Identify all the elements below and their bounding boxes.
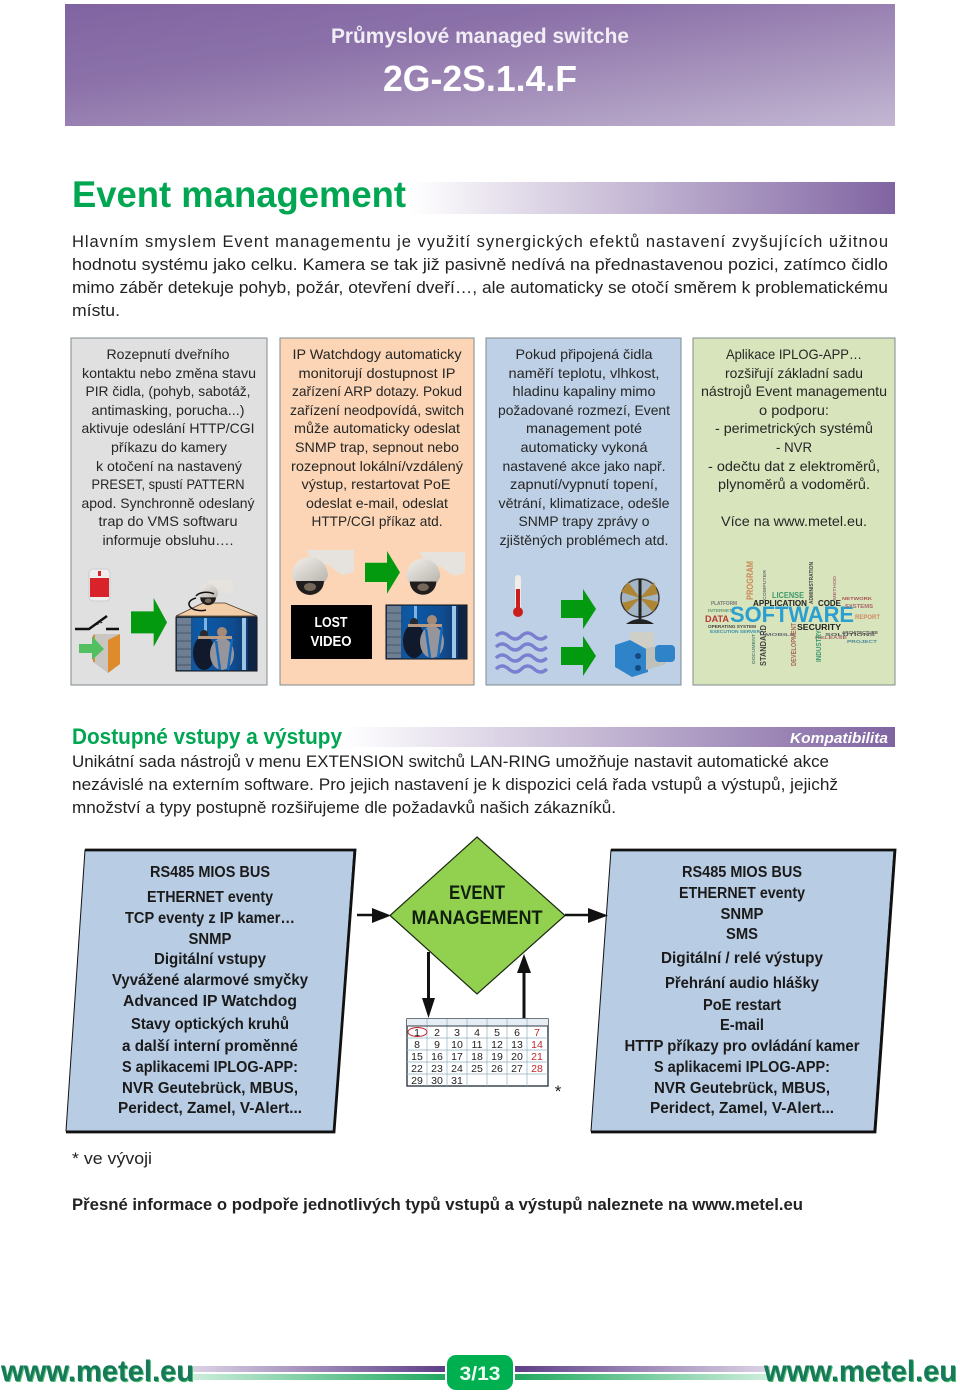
compatibility tag: Kompatibilita <box>790 730 888 747</box>
inputs list: Vyvážené alarmové smyčky <box>112 972 308 989</box>
paragraph: inputs and outputs: nezávislé na externím software. Pro jejich nastavení je k dispozici celá řada vstupů a výstupů, jejichž <box>72 776 838 794</box>
calendar days: 1 <box>414 1027 420 1039</box>
calendar days: 14 <box>531 1039 543 1051</box>
panel text: odeslat e-mail, odeslat <box>306 495 448 511</box>
inputs list: NVR Geutebrück, MBUS, <box>122 1080 298 1097</box>
icon: thermometer <box>513 575 523 617</box>
footer url left: www.metel.eu <box>0 1355 194 1388</box>
word cloud: SOFTWARE <box>730 602 854 627</box>
panel text: aktivuje odeslání HTTP/CGI <box>82 420 254 436</box>
panel text: PRESET, spustí PATTERN <box>92 476 244 492</box>
inputs list: S aplikacemi IPLOG-APP: <box>122 1059 298 1076</box>
calendar days: 20 <box>511 1051 523 1063</box>
arrow: up from calendar <box>517 954 531 1018</box>
event management diamond: MANAGEMENT <box>412 907 543 929</box>
word cloud: DATA <box>705 614 729 624</box>
word cloud: OPERATING SYSTEM <box>708 624 756 629</box>
outputs list: Peridect, Zamel, V-Alert... <box>650 1100 834 1117</box>
calendar days: 26 <box>491 1063 503 1075</box>
arrow <box>561 636 596 676</box>
word cloud: LICENSE <box>772 591 805 600</box>
lost video box <box>291 605 372 659</box>
outputs list: SMS <box>726 926 758 943</box>
inputs list: SNMP <box>188 931 232 948</box>
calendar days <box>411 1027 543 1087</box>
panel text: plynoměrů a vodoměrů. <box>718 476 870 492</box>
word cloud: COMPUTER <box>762 569 767 600</box>
intro paragraph: Hlavním smyslem Event managementu je využití synergických efektů nastavení zvyšujících užitnou <box>72 233 888 251</box>
asterisk: * <box>555 1082 562 1101</box>
word cloud: MOBILE <box>765 632 795 637</box>
arrow <box>561 589 596 629</box>
icon: fan <box>621 579 659 624</box>
panel text: - NVR <box>776 439 812 455</box>
icon: alarm sensor <box>89 569 110 601</box>
panel text: rozšiřují základní sadu <box>725 365 863 381</box>
intro paragraph <box>72 233 888 320</box>
inputs list: Peridect, Zamel, V-Alert... <box>118 1100 302 1117</box>
arrow <box>365 551 400 594</box>
inputs list: Stavy optických kruhů <box>131 1016 289 1033</box>
word cloud: RELEASE <box>815 635 847 640</box>
footer url left: www.metel.eu <box>1 1356 195 1389</box>
calendar days: 22 <box>411 1063 423 1075</box>
calendar days: 16 <box>431 1051 443 1063</box>
inputs list: ETHERNET eventy <box>147 889 273 906</box>
intro paragraph: hodnotu systému jako celku. Kamera se tak již pasivně nedívá na přednastavenou pozici, zatímco čidlo <box>72 256 888 274</box>
panel text: k otočení na nastavený <box>96 458 242 474</box>
panel text: kontaktu nebo změna stavu <box>82 365 256 381</box>
header title: 2G-2S.1.4.F <box>383 58 577 99</box>
panel text: Více na www.metel.eu. <box>721 513 867 529</box>
icon: water pump <box>615 632 675 677</box>
word cloud: REPORT <box>855 615 880 621</box>
panel text: větrání, klimatizace, odešle <box>498 495 670 511</box>
icon: opening door <box>79 634 120 673</box>
panel text: o podporu: <box>759 402 829 418</box>
calendar days: 25 <box>471 1063 483 1075</box>
arrow: down to calendar <box>422 952 435 1018</box>
panel text <box>290 346 464 529</box>
word cloud: DEVELOPMENT <box>791 622 798 666</box>
footer url right: www.metel.eu <box>763 1355 957 1388</box>
panel text: zapnutí/vypnutí topení, <box>510 476 658 492</box>
calendar days: 23 <box>431 1063 443 1075</box>
word cloud: ADMINISTRATION <box>809 562 815 604</box>
calendar days: 24 <box>451 1063 463 1075</box>
calendar days: 15 <box>411 1051 423 1063</box>
panel text: rozepnout lokální/vzdálený <box>291 458 463 474</box>
panel text: zařízení neodpovídá, switch <box>290 402 464 418</box>
word cloud: ARCHITECTURE <box>842 630 878 635</box>
word cloud: METHOD <box>832 575 837 600</box>
page number badge <box>447 1355 513 1390</box>
paragraph: inputs and outputs: množství a typy postupně rozšiřujeme dle požadavků našich zákazníků. <box>72 799 616 817</box>
calendar days: 11 <box>472 1039 483 1051</box>
header subtitle: Průmyslové managed switche <box>331 25 629 48</box>
icon: camera left <box>292 550 354 595</box>
event management diamond: EVENT <box>449 882 505 904</box>
panel text: HTTP/CGI příkaz atd. <box>312 513 442 529</box>
inputs list: Digitální vstupy <box>154 951 266 968</box>
panel text: apod. Synchronně odeslaný <box>82 495 254 511</box>
panel text: antimasking, porucha...) <box>92 402 244 418</box>
panel text: informuje obsluhu…. <box>102 532 234 548</box>
arrow: event management to outputs <box>565 908 608 923</box>
paragraph: inputs and outputs: Unikátní sada nástrojů v menu EXTENSION switchů LAN-RING umožňuje nastavit automatické akce <box>72 753 829 771</box>
arrow <box>131 598 167 647</box>
closing note: Přesné informace o podpoře jednotlivých typů vstupů a výstupů naleznete na www.metel.eu <box>72 1196 803 1214</box>
calendar <box>407 1019 548 1087</box>
footer url right: www.metel.eu <box>764 1356 958 1389</box>
photo: camera view <box>176 617 257 671</box>
panel text: Aplikace IPLOG-APP… <box>726 346 862 362</box>
word cloud: NETWORK <box>842 596 873 601</box>
panel text: hladinu kapaliny mimo <box>512 383 656 399</box>
panel text: požadované rozmezí, Event <box>498 402 670 418</box>
footnote: * ve vývoji <box>72 1150 152 1168</box>
word cloud: PLATFORM <box>711 601 737 607</box>
word cloud: INTERNET <box>708 608 732 613</box>
icon: door contact switch <box>75 616 119 629</box>
panel text: - perimetrických systémů <box>715 420 873 436</box>
calendar days: 8 <box>414 1039 420 1051</box>
panel text <box>82 346 256 548</box>
panel text: nastavené akce jako např. <box>502 458 666 474</box>
section bar: inputs and outputs <box>345 727 895 747</box>
inputs list: Advanced IP Watchdog <box>123 993 297 1010</box>
word cloud: SYSTEMS <box>845 604 874 610</box>
panel: sensors <box>486 338 681 685</box>
word cloud: SOLUTIONS <box>825 632 875 637</box>
panel text: zjištěných problémech atd. <box>500 532 668 548</box>
outputs list: HTTP příkazy pro ovládání kamer <box>624 1038 860 1055</box>
calendar days: 12 <box>491 1039 503 1051</box>
lost video box: LOST <box>314 615 348 631</box>
calendar days: 3 <box>454 1027 460 1039</box>
panel text: zařízení ARP dotazy. Pokud <box>292 383 462 399</box>
calendar days: 17 <box>451 1051 463 1063</box>
calendar days: 2 <box>434 1027 440 1039</box>
calendar days: 18 <box>471 1051 483 1063</box>
word cloud: PROJECT <box>847 639 877 644</box>
outputs list <box>624 864 860 1117</box>
inputs list: a další interní proměnné <box>122 1038 298 1055</box>
calendar days: 6 <box>514 1027 520 1039</box>
word cloud: INDUSTRY <box>816 630 823 662</box>
arrow: inputs to event management <box>357 908 391 923</box>
panel: inputs <box>66 850 355 1132</box>
inputs list: TCP eventy z IP kamer… <box>125 910 295 927</box>
outputs list: S aplikacemi IPLOG-APP: <box>654 1059 830 1076</box>
event management diamond <box>390 837 565 994</box>
panel text: nástrojů Event managementu <box>701 383 887 399</box>
calendar days: 5 <box>494 1027 500 1039</box>
panel text: automaticky vykoná <box>520 439 648 455</box>
intro paragraph: mimo záběr detekuje pohyb, požár, otevření dveří…, ale automaticky se otočí směrem k problematickému <box>72 279 888 297</box>
panel: IPLOG-APP software <box>693 338 895 685</box>
icon: rotating camera <box>176 580 257 616</box>
paragraph: inputs and outputs <box>72 753 838 817</box>
panel: outputs <box>591 850 895 1132</box>
word cloud <box>705 561 880 666</box>
calendar days: 31 <box>451 1075 463 1087</box>
inputs list: RS485 MIOS BUS <box>150 864 270 881</box>
panel text: příkazu do kamery <box>111 439 227 455</box>
header banner <box>65 4 895 126</box>
outputs list: Digitální / relé výstupy <box>661 950 823 967</box>
panel text: trap do VMS softwaru <box>98 513 238 529</box>
calendar days: 30 <box>431 1075 443 1087</box>
calendar days: 19 <box>491 1051 503 1063</box>
calendar days: 13 <box>511 1039 523 1051</box>
panel text: Pokud připojená čidla <box>516 346 653 362</box>
word cloud: DOCUMENT <box>751 634 756 664</box>
outputs list: RS485 MIOS BUS <box>682 864 802 881</box>
outputs list: SNMP <box>720 906 764 923</box>
panel text: PIR čidla, (pohyb, sabotáž, <box>86 383 250 399</box>
intro paragraph: místu. <box>72 302 120 320</box>
heading: event management: Event management <box>72 174 406 215</box>
word cloud: SECURITY <box>797 623 842 632</box>
panel: door and sensor events <box>71 338 267 685</box>
panel text: naměří teplotu, vlhkost, <box>508 365 660 381</box>
panel text: IP Watchdogy automaticky <box>292 346 462 362</box>
calendar days: 4 <box>474 1027 480 1039</box>
outputs list: Přehrání audio hlášky <box>665 975 819 992</box>
icon: camera right <box>406 552 465 595</box>
panel text <box>498 346 670 548</box>
panel text: může automaticky odeslat <box>294 420 460 436</box>
calendar days: 27 <box>511 1063 523 1075</box>
outputs list: NVR Geutebrück, MBUS, <box>654 1080 830 1097</box>
word cloud: PROGRAM <box>745 561 755 600</box>
outputs list: ETHERNET eventy <box>679 885 805 902</box>
icon: water waves <box>496 633 547 672</box>
outputs list: E-mail <box>720 1017 764 1034</box>
calendar days: 28 <box>531 1063 543 1075</box>
inputs list <box>112 864 308 1117</box>
panel text: monitorují dostupnost IP <box>298 365 456 381</box>
calendar days: 10 <box>451 1039 463 1051</box>
panel text: Rozepnutí dveřního <box>106 346 230 362</box>
panel: IP watchdog <box>280 338 474 685</box>
word cloud: CODE <box>818 599 842 608</box>
panel text: SNMP trap, sepnout nebo <box>295 439 459 455</box>
heading: inputs and outputs: Dostupné vstupy a výstupy <box>72 724 343 749</box>
word cloud: EXECUTION SERVER <box>710 629 761 634</box>
word cloud: STANDARD <box>759 625 768 666</box>
word cloud: APPLICATION <box>753 599 807 608</box>
page number badge: 3/13 <box>460 1364 500 1385</box>
panel text: SNMP trapy zprávy o <box>518 513 650 529</box>
footer <box>0 1355 958 1390</box>
calendar days: 7 <box>534 1027 540 1039</box>
outputs list: PoE restart <box>703 997 781 1014</box>
section bar: event management <box>410 182 895 214</box>
lost video box: VIDEO <box>310 634 352 650</box>
calendar days: 9 <box>434 1039 440 1051</box>
panel text: management poté <box>526 420 642 436</box>
panel text: výstup, restartovat PoE <box>302 476 450 492</box>
panel text <box>701 346 887 529</box>
calendar days: 29 <box>411 1075 423 1087</box>
calendar days: 21 <box>531 1051 543 1063</box>
panel text: - odečtu dat z elektroměrů, <box>708 458 880 474</box>
photo: restored video <box>386 605 467 659</box>
